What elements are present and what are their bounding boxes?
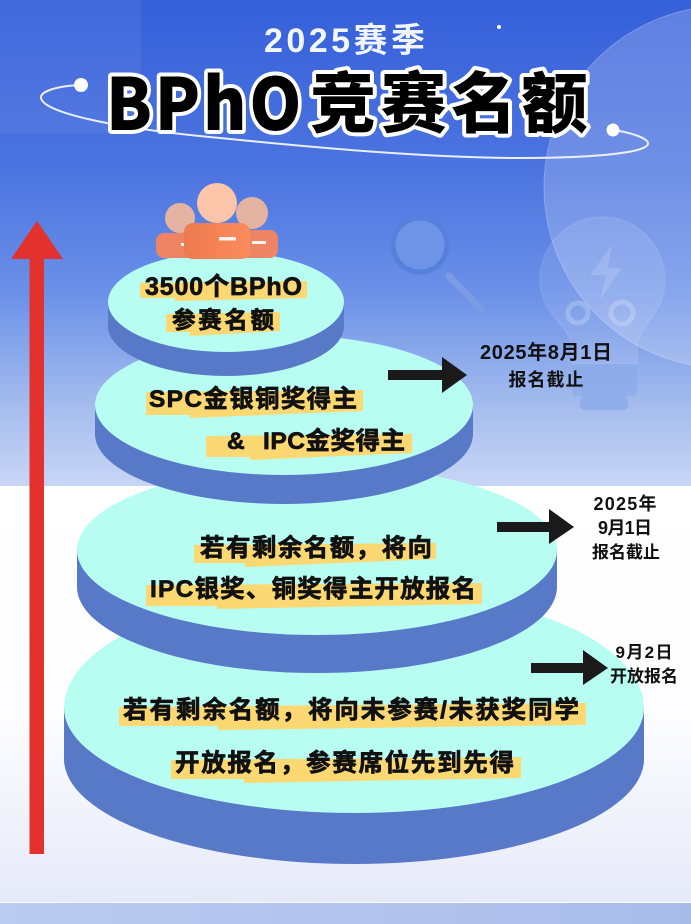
title [106,47,592,151]
title: 竞赛名额 [310,67,592,141]
open date label [610,643,678,686]
tier 3 disc [77,465,557,673]
red upward arrow [11,221,63,854]
tier 1 text: 3500个BPhO [145,273,302,301]
subtitle: 2025赛季 [264,22,425,60]
tier 1 text: 参赛名额 [172,306,274,333]
arrow: deadline 2 [497,509,574,544]
tier 1 text [140,273,307,336]
tier 3 text [146,534,482,609]
arrow: deadline 1 [388,357,467,393]
tier 2 disc [95,335,473,504]
tier 2 text: & [227,428,245,455]
tier 4 disc [64,587,644,864]
arrow: open date [531,650,608,685]
ring dots [74,25,620,136]
tier 4 text: 若有剩余名额，将向未参赛/未获奖同学 [123,695,579,724]
tier 1 disc [108,252,344,376]
background: blue sky [0,0,691,486]
deadline 2 label: 2025年 [594,493,656,514]
deadline 2 label: 报名截止 [592,543,660,562]
tier 2 text: SPC金银铜奖得主 [149,385,357,413]
deadline 2 label: 9月1日 [598,518,652,538]
tier 3 text: 若有剩余名额，将向 [200,534,432,562]
icon: light bulb [540,217,665,410]
deadline 1 label: 报名截止 [508,370,584,390]
tier 4 text [119,695,586,783]
open date label: 开放报名 [610,667,678,686]
title ring [41,85,648,158]
tier 2 text: IPC金奖得主 [263,427,405,455]
icon: magnifier [393,218,481,309]
open date label: 9月2日 [616,643,672,662]
tier 4 text: 开放报名，参赛席位先到先得 [175,748,514,777]
decorative panel: top left [0,0,141,133]
decorative circle [544,6,691,368]
tier 2 text [146,385,412,460]
icon: people group [156,183,278,259]
background: pale floor [0,486,691,902]
deadline 1 label [480,341,612,390]
title: BPhO [106,47,304,151]
deadline 2 label [592,493,660,562]
tier 3 text: IPC银奖、铜奖得主开放报名 [150,575,476,603]
background: bottom band [0,903,691,924]
deadline 1 label: 2025年8月1日 [480,341,612,364]
